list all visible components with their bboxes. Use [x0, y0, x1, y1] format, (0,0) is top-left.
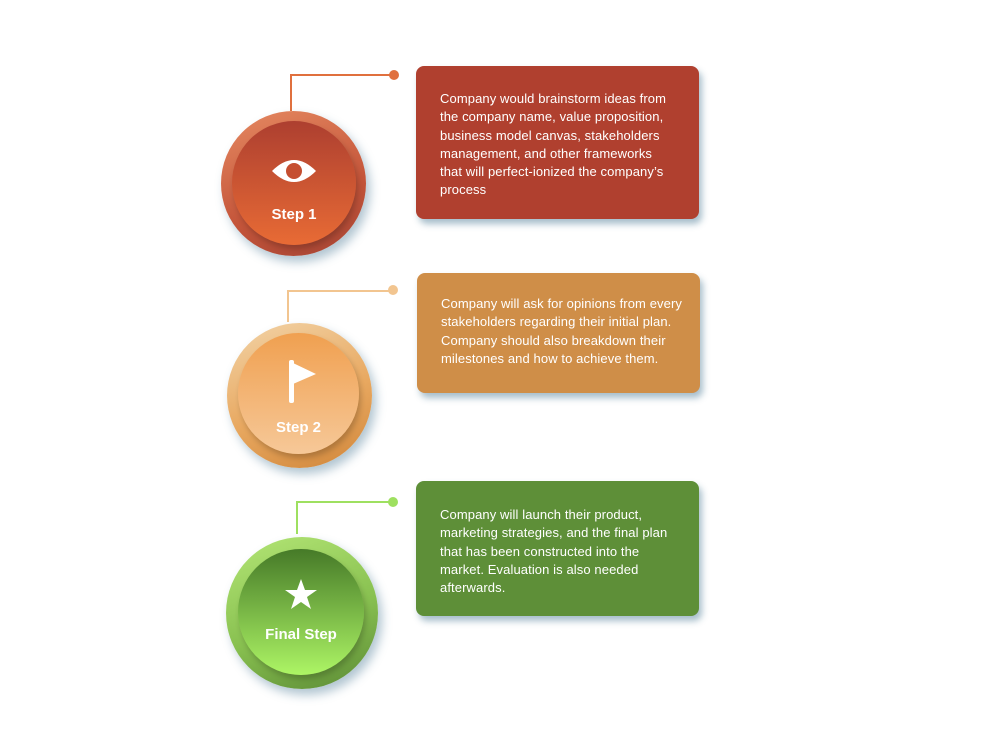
icon: star [285, 579, 317, 609]
label: Final Step: Final Step [265, 626, 337, 643]
box: step 2 text: milestones and how to achieve them. [441, 351, 658, 366]
box: step 1 text: the company name, value proposition, [440, 109, 663, 124]
box: step 1 text: management, and other frameworks [440, 146, 652, 161]
box: final step text: that has been constructed into the [440, 544, 639, 559]
label: Step 2: Step 2 [276, 419, 321, 436]
connector: step 1 [291, 70, 399, 111]
box: final step text: marketing strategies, and the final plan [440, 525, 667, 540]
label: Step 1: Step 1 [271, 206, 316, 223]
icon: flag [289, 360, 316, 403]
final step circle [226, 537, 378, 689]
connector: step 2 [288, 285, 398, 322]
box: step 2 text: Company will ask for opinions from every [441, 296, 682, 311]
box: step 1 text [416, 66, 699, 219]
box: final step text: Company will launch their product, [440, 507, 642, 522]
box: step 1 text: Company would brainstorm ideas from [440, 91, 666, 106]
step 2 circle [227, 323, 372, 468]
box: step 2 text: stakeholders regarding their initial plan. [441, 314, 671, 329]
connector: final step [297, 497, 398, 534]
box: step 2 text [417, 273, 700, 393]
box: step 1 text: business model canvas, stakeholders [440, 128, 660, 143]
box: final step text [416, 481, 699, 616]
box: step 1 text: process [440, 182, 486, 197]
box: step 1 text: that will perfect-ionized the company’s [440, 164, 663, 179]
icon: eye [272, 160, 316, 182]
box: step 2 text: Company should also breakdown their [441, 333, 666, 348]
step 1 circle [221, 111, 366, 256]
box: final step text: afterwards. [440, 580, 505, 595]
box: final step text: market. Evaluation is also needed [440, 562, 638, 577]
